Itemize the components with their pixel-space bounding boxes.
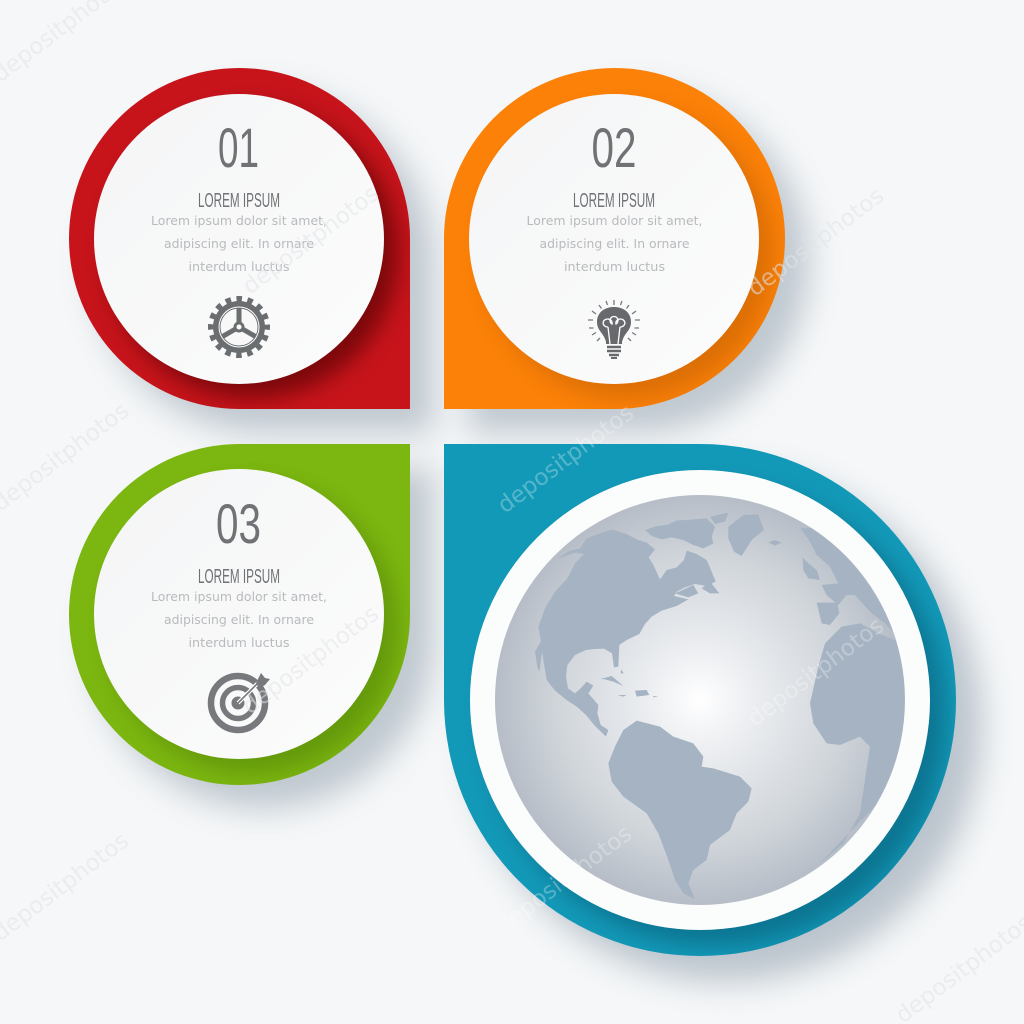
body text bbox=[151, 590, 327, 650]
watermarks: depositphotos bbox=[238, 181, 384, 300]
watermarks: depositphotos bbox=[743, 183, 889, 302]
europe bbox=[801, 528, 892, 630]
south america bbox=[608, 721, 752, 899]
arctic islands bbox=[645, 513, 728, 548]
panel: globe blue bbox=[444, 444, 982, 982]
number 03: 03 bbox=[216, 492, 261, 555]
icon: target bbox=[211, 673, 270, 730]
body text bbox=[151, 214, 327, 274]
caribbean islands bbox=[601, 676, 658, 697]
baja bbox=[535, 642, 542, 672]
body text bbox=[526, 214, 702, 274]
florida keys bbox=[621, 669, 624, 673]
body text: adipiscing elit. In ornare bbox=[540, 237, 690, 251]
watermarks: depositphotos bbox=[493, 400, 639, 519]
heading: LOREM IPSUM bbox=[198, 565, 280, 588]
body text: Lorem ipsum dolor sit amet, bbox=[151, 214, 327, 228]
watermarks: depositphotos bbox=[238, 601, 384, 720]
panel: step 02 orange bbox=[444, 68, 809, 433]
panel: step 01 red bbox=[69, 68, 434, 433]
body text: adipiscing elit. In ornare bbox=[164, 237, 314, 251]
north america bbox=[538, 529, 716, 737]
icon: light bulb bbox=[588, 300, 640, 358]
orange teardrop bbox=[444, 68, 785, 409]
body text: interdum luctus bbox=[188, 636, 290, 650]
icon: gear bbox=[211, 299, 267, 355]
british isles bbox=[803, 557, 820, 580]
watermarks: depositphotos bbox=[491, 821, 637, 940]
number 02: 02 bbox=[592, 116, 636, 179]
red teardrop bbox=[69, 68, 410, 409]
globe bbox=[495, 495, 913, 905]
panel: step 03 green bbox=[69, 444, 434, 809]
africa bbox=[810, 623, 910, 863]
body text: Lorem ipsum dolor sit amet, bbox=[151, 590, 327, 604]
spain bbox=[817, 603, 839, 625]
body text: interdum luctus bbox=[188, 260, 290, 274]
heading: LOREM IPSUM bbox=[573, 189, 655, 212]
body text: adipiscing elit. In ornare bbox=[164, 613, 314, 627]
watermarks: depositphotos bbox=[743, 613, 889, 732]
green teardrop bbox=[69, 444, 410, 785]
number 01: 01 bbox=[218, 116, 259, 179]
body text: Lorem ipsum dolor sit amet, bbox=[526, 214, 702, 228]
greenland bbox=[728, 514, 764, 556]
white ring bbox=[470, 470, 930, 930]
newfoundland and maritimes bbox=[676, 584, 720, 598]
body text: interdum luctus bbox=[564, 260, 665, 274]
blue teardrop bbox=[444, 444, 956, 956]
world map continents bbox=[535, 513, 913, 899]
heading: LOREM IPSUM bbox=[198, 189, 280, 212]
iceland bbox=[768, 540, 782, 546]
